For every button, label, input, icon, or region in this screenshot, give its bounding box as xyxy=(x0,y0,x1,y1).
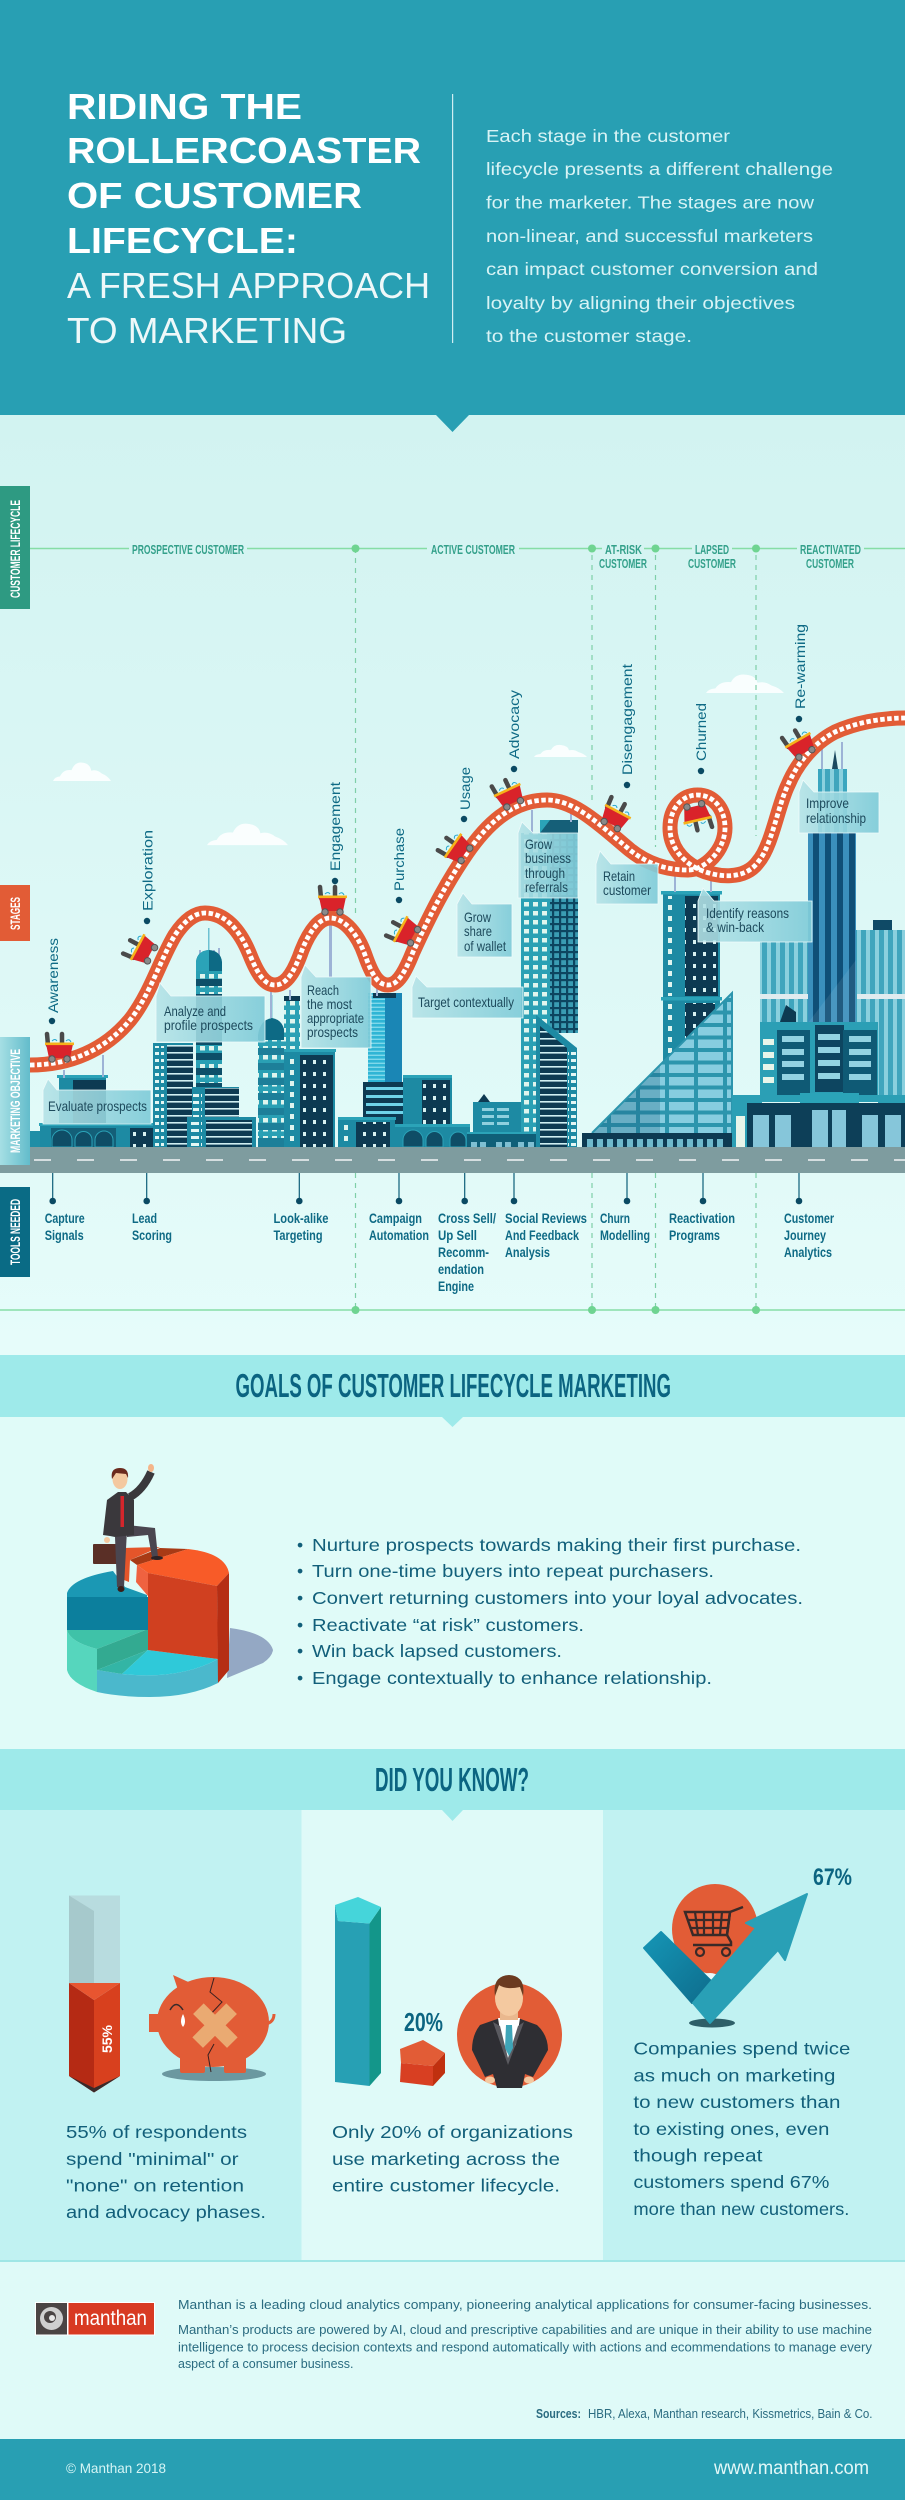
goals bullet list: • xyxy=(297,1641,303,1661)
goals bullet list: Turn one-time buyers into repeat purchasers. xyxy=(312,1561,714,1581)
callout: reach the most appropriate prospects: prospects xyxy=(307,1024,358,1040)
lifecycle phase labels: PROSPECTIVE CUSTOMER xyxy=(132,542,244,557)
sources: HBR, Alexa, Manthan research, Kissmetrics, Bain & Co. xyxy=(588,2407,872,2421)
goals bullet list: Engage contextually to enhance relationship. xyxy=(312,1668,712,1688)
about text: intelligence to process decision contexts and respond automatically with actions and ecommendations to manage every xyxy=(178,2340,873,2354)
goals bullet list xyxy=(297,1535,803,1688)
tools needed labels: Social Reviews xyxy=(505,1211,587,1226)
stat text: 55 percent: "none" on retention xyxy=(66,2176,244,2196)
stat text: 20 percent: use marketing across the xyxy=(332,2149,560,2169)
grid tower + block xyxy=(284,997,300,1050)
sources: Sources: xyxy=(536,2407,581,2421)
tower behind triangle xyxy=(663,892,720,1062)
goals bullet list: Nurture prospects towards making their first purchase. xyxy=(312,1535,801,1555)
icon: man in orange circle xyxy=(457,1975,562,2088)
goals bullet list: Win back lapsed customers. xyxy=(312,1641,562,1661)
stage labels: Re-warming xyxy=(792,624,808,709)
tools needed labels: Analysis xyxy=(505,1245,550,1260)
stat text: 67 percent: more than new customers. xyxy=(633,2199,849,2219)
lifecycle phase labels: ACTIVE CUSTOMER xyxy=(431,542,515,557)
title: OF CUSTOMER xyxy=(67,175,362,216)
triangle glass building xyxy=(592,993,732,1133)
callout: target contextually xyxy=(412,976,523,1018)
tools needed markers xyxy=(49,1173,802,1204)
title: RIDING THE xyxy=(67,86,302,127)
road xyxy=(0,1147,905,1173)
callout: grow business through referrals: referrals xyxy=(525,879,568,895)
tab: tools needed: TOOLS NEEDED xyxy=(7,1199,23,1265)
stat text: 55 percent: 55% of respondents xyxy=(66,2122,247,2142)
stage labels: Awareness xyxy=(45,938,61,1013)
callout: reach the most appropriate prospects xyxy=(301,965,371,1048)
domed tower xyxy=(199,948,220,962)
tab: customer lifecycle xyxy=(0,486,30,609)
stat text: 67 percent xyxy=(633,2038,850,2219)
front building right xyxy=(732,1095,762,1147)
callout: reach the most appropriate prospects: appropriate xyxy=(307,1010,364,1026)
callout: reach the most appropriate prospects: the most xyxy=(307,996,352,1012)
coaster carts xyxy=(45,725,820,1062)
tools needed labels: Automation xyxy=(369,1228,429,1243)
lifecycle phase labels: CUSTOMER xyxy=(806,556,854,571)
callout: grow share of wallet: share xyxy=(464,923,492,939)
intro text: for the marketer. The stages are now xyxy=(486,192,814,212)
far towers right xyxy=(760,942,808,1102)
callout: grow business through referrals: Grow xyxy=(525,836,553,852)
callout: retain customer xyxy=(596,851,658,904)
tools needed labels: And Feedback xyxy=(505,1228,579,1243)
callout: grow share of wallet: of wallet xyxy=(464,938,506,954)
callout: identify reasons and win-back xyxy=(698,888,812,942)
goals heading band xyxy=(0,1355,905,1427)
callout: improve relationship xyxy=(799,780,879,833)
panel: rollercoaster diagram xyxy=(0,415,905,1355)
domed tower two xyxy=(271,995,272,1019)
goals bullet list: • xyxy=(297,1561,303,1581)
tools needed labels: Lead xyxy=(132,1211,157,1226)
callout: grow share of wallet: Grow xyxy=(464,909,492,925)
stat text: 67 percent: customers spend 67% xyxy=(633,2172,829,2192)
title: ROLLERCOASTER xyxy=(67,130,421,171)
tools needed labels: Engine xyxy=(438,1279,474,1294)
callout: analyze and profile: Analyze and xyxy=(164,1003,226,1019)
intro text: to the customer stage. xyxy=(486,326,692,346)
callout: evaluate prospects: Evaluate prospects xyxy=(48,1098,147,1114)
goals bullet list: • xyxy=(297,1668,303,1688)
callout: improve relationship: relationship xyxy=(806,810,866,826)
goals bullet list: Convert returning customers into your loyal advocates. xyxy=(312,1588,803,1608)
stat text: 20 percent xyxy=(332,2122,573,2196)
lifecycle phase labels xyxy=(132,542,861,571)
striped block A xyxy=(153,1043,193,1147)
callout: grow business through referrals: through xyxy=(525,865,565,881)
tab: marketing objective xyxy=(0,1037,30,1165)
tab: stages xyxy=(0,885,30,941)
tools needed labels: Look-alike xyxy=(274,1211,329,1226)
footer bar: www.manthan.com xyxy=(713,2458,869,2479)
tools needed labels: Churn xyxy=(600,1211,630,1226)
clouds xyxy=(53,674,784,845)
low blocks mid xyxy=(338,1118,395,1147)
bright tower xyxy=(368,993,385,1082)
callout: analyze and profile: profile prospects xyxy=(164,1017,253,1033)
stat: 55 percent gauge: 55% xyxy=(99,2024,115,2053)
tools needed labels: Cross Sell/ xyxy=(438,1211,496,1226)
stepped blocks xyxy=(192,1087,239,1147)
tools needed labels: Up Sell xyxy=(438,1228,477,1243)
tools needed labels: endation xyxy=(438,1262,484,1277)
about text: Manthan’s products are powered by AI, cloud and prescriptive capabilities and are unique in their ability to use machine xyxy=(178,2323,872,2337)
goals bullet list: Reactivate “at risk” customers. xyxy=(312,1615,584,1635)
title: TO MARKETING xyxy=(67,310,347,351)
tab: stages: STAGES xyxy=(7,897,23,930)
panel: did you know xyxy=(0,1749,905,2261)
panel: about manthan xyxy=(0,2260,905,2439)
goals bullet list: • xyxy=(297,1535,303,1555)
callout: identify reasons and win-back: & win-back xyxy=(706,919,765,935)
callout: grow business through referrals xyxy=(518,822,578,898)
low left block xyxy=(30,1131,40,1147)
icon: pie chart with businessman xyxy=(67,1464,273,1697)
about text: Manthan is a leading cloud analytics company, pioneering analytical applications for consumer-facing businesses. xyxy=(178,2298,872,2312)
did you know heading band xyxy=(0,1749,905,1821)
stat text: 67 percent: to new customers than xyxy=(633,2092,840,2112)
lifecycle phase labels: REACTIVATED xyxy=(800,542,861,557)
callout: evaluate prospects xyxy=(43,1079,151,1124)
icon: broken piggy bank xyxy=(149,1975,274,2081)
lifecycle phase labels: CUSTOMER xyxy=(599,556,647,571)
stat text: 55 percent: and advocacy phases. xyxy=(66,2202,266,2222)
header panel xyxy=(0,0,905,415)
manthan logo xyxy=(35,2302,155,2336)
tools needed labels: Targeting xyxy=(274,1228,322,1243)
about text: aspect of a consumer business. xyxy=(178,2357,354,2371)
callout: identify reasons and win-back: Identify reasons xyxy=(706,905,789,921)
did you know heading band: DID YOU KNOW? xyxy=(375,1761,529,1798)
tools needed labels: Recomm- xyxy=(438,1245,489,1260)
lifecycle phase labels: LAPSED xyxy=(695,542,729,557)
tools needed labels xyxy=(45,1211,835,1294)
tools needed labels: Reactivation xyxy=(669,1211,735,1226)
stat text: 67 percent: though repeat xyxy=(633,2146,763,2166)
intro text: loyalty by aligning their objectives xyxy=(486,293,795,313)
stat: bars chart 20 percent xyxy=(335,1897,445,2086)
tab: marketing objective: MARKETING OBJECTIVE xyxy=(7,1049,23,1153)
goals bullet list: • xyxy=(297,1615,303,1635)
lifecycle phase lines xyxy=(0,544,905,1314)
callout: grow business through referrals: business xyxy=(525,850,571,866)
stage labels xyxy=(45,624,808,1024)
stage labels: Purchase xyxy=(391,828,407,891)
stat: bars chart 20 percent: 20% xyxy=(404,2007,443,2037)
intro text: lifecycle presents a different challenge xyxy=(486,159,833,179)
city skyline xyxy=(30,742,905,1147)
tools needed labels: Programs xyxy=(669,1228,720,1243)
tab: tools needed xyxy=(0,1187,30,1277)
lifecycle phase labels: CUSTOMER xyxy=(688,556,736,571)
stage labels: Exploration xyxy=(140,830,156,911)
tools needed labels: Signals xyxy=(45,1228,84,1243)
callout: improve relationship: Improve xyxy=(806,795,849,811)
tall blue tower xyxy=(808,833,856,1023)
businessman xyxy=(93,1464,163,1592)
tools needed labels: Campaign xyxy=(369,1211,422,1226)
header notch xyxy=(436,415,469,432)
callout: analyze and profile xyxy=(156,983,265,1042)
footer bar: © Manthan 2018 xyxy=(66,2460,166,2476)
rollercoaster track xyxy=(30,718,905,1065)
stat text: 55 percent: spend "minimal" or xyxy=(66,2149,239,2169)
title: A FRESH APPROACH xyxy=(67,265,430,306)
intro text xyxy=(486,126,833,346)
callout: reach the most appropriate prospects: Reach xyxy=(307,982,339,998)
stage labels: Engagement xyxy=(327,782,343,871)
panel: goals of customer lifecycle marketing xyxy=(0,1355,905,1749)
title: LIFECYCLE: xyxy=(67,220,298,261)
tools needed labels: Customer xyxy=(784,1211,835,1226)
stage labels: Churned xyxy=(693,703,709,761)
tools needed labels: Capture xyxy=(45,1211,85,1226)
callout: grow share of wallet xyxy=(457,893,512,957)
stat text: 55 percent xyxy=(66,2122,266,2222)
icon: shopping cart with rising arrow xyxy=(644,1864,852,2028)
stage labels: Advocacy xyxy=(506,690,522,759)
intro text: non-linear, and successful marketers xyxy=(486,226,813,246)
tools needed labels: Scoring xyxy=(132,1228,172,1243)
goals bullet list: • xyxy=(297,1588,303,1608)
tools needed labels: Analytics xyxy=(784,1245,832,1260)
icon: shopping cart with rising arrow: 67% xyxy=(813,1864,852,1891)
tools needed labels: Journey xyxy=(784,1228,826,1243)
intro text: Each stage in the customer xyxy=(486,126,730,146)
callout: retain customer: customer xyxy=(603,882,651,898)
intro text: can impact customer conversion and xyxy=(486,259,818,279)
about text xyxy=(178,2298,873,2371)
tools needed labels: Modelling xyxy=(600,1228,650,1243)
footer bar xyxy=(0,2439,905,2500)
stage labels: Disengagement xyxy=(619,664,635,775)
title xyxy=(67,86,430,351)
stat text: 20 percent: Only 20% of organizations xyxy=(332,2122,573,2142)
callout: target contextually: Target contextually xyxy=(418,994,514,1010)
stat text: 20 percent: entire customer lifecycle. xyxy=(332,2176,560,2196)
tall grid tower xyxy=(540,820,578,833)
tab: customer lifecycle: CUSTOMER LIFECYCLE xyxy=(7,500,23,598)
stat text: 67 percent: to existing ones, even xyxy=(633,2119,829,2139)
stat text: 67 percent: as much on marketing xyxy=(633,2065,835,2085)
stage labels: Usage xyxy=(457,767,473,810)
stat: 55 percent gauge xyxy=(69,1896,120,2092)
shopping cart xyxy=(685,1907,743,1956)
stat text: 67 percent: Companies spend twice xyxy=(633,2038,850,2058)
callout: retain customer: Retain xyxy=(603,868,635,884)
lifecycle phase labels: AT-RISK xyxy=(605,542,642,557)
track supports xyxy=(63,810,712,1078)
manthan logo: manthan xyxy=(74,2307,147,2330)
